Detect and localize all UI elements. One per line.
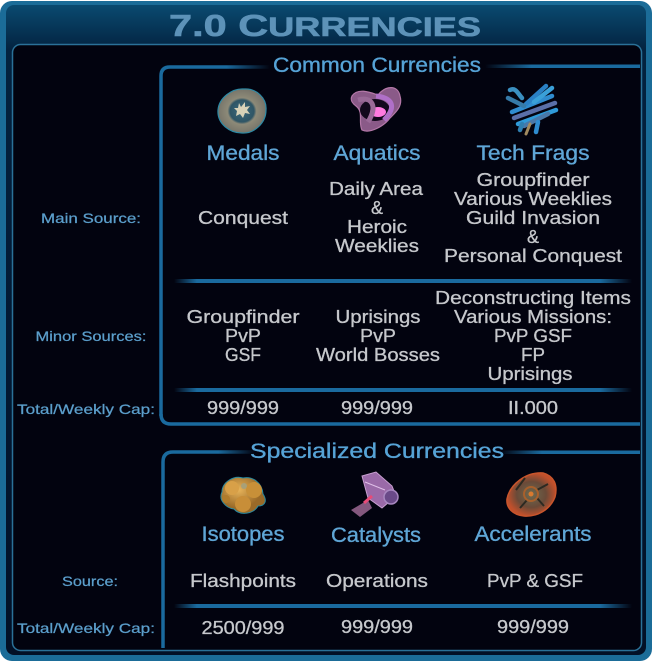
heading: aquatics: Aquatics: [334, 142, 420, 165]
text: aquatics minor sources: Uprisings: [336, 307, 420, 327]
heading: common currencies: Common Currencies: [273, 54, 481, 77]
text: medals cap: 999/999: [207, 398, 279, 418]
heading: specialized currencies: Specialized Currencies: [250, 440, 504, 463]
label: minor sources: Minor Sources:: [36, 328, 146, 344]
heading: accelerants: Accelerants: [474, 523, 592, 546]
text: flashpoints: Flashpoints: [190, 571, 296, 591]
heading: tech frags: Tech Frags: [476, 142, 590, 165]
text: tech frags cap: II.000: [508, 398, 558, 418]
text: medals minor sources: Groupfinder: [186, 307, 300, 327]
text: aquatics minor sources: [316, 307, 440, 365]
text: tech frags minor sources: [435, 288, 631, 384]
icon: aquatic: [351, 88, 401, 131]
text: tech frags main source: Personal Conquest: [444, 246, 622, 266]
panel: common currencies: [17, 54, 640, 424]
title: 7.0 C URRENCIES: [169, 8, 481, 43]
text: aquatics main source: [329, 179, 424, 256]
text: pvp and gsf: PvP & GSF: [487, 571, 583, 591]
icon: isotopes: [221, 477, 265, 513]
text: tech frags main source: [444, 170, 622, 266]
label: total weekly cap: Total/Weekly Cap:: [17, 401, 155, 417]
text: tech frags minor sources: Various Missions:: [454, 307, 612, 327]
text: isotopes cap: 2500/999: [202, 618, 284, 638]
icon: tech frags: [508, 86, 556, 134]
text: tech frags minor sources: Uprisings: [488, 364, 572, 384]
text: medals minor sources: PvP: [225, 326, 261, 346]
panel: specialized currencies: [17, 440, 640, 648]
text: conquest: Conquest: [198, 208, 288, 228]
text: medals minor sources: GSF: [225, 345, 261, 365]
text: tech frags minor sources: FP: [521, 345, 545, 365]
text: aquatics main source: &: [371, 198, 383, 218]
text: accelerants cap: 999/999: [497, 617, 569, 637]
panel frame: specialized: [163, 450, 640, 648]
label: total weekly cap: Total/Weekly Cap:: [17, 620, 155, 636]
label: source: Source:: [62, 573, 118, 589]
text: aquatics cap: 999/999: [341, 398, 413, 418]
heading: medals: Medals: [206, 142, 280, 165]
label: main source: Main Source:: [41, 210, 141, 226]
heading: isotopes: Isotopes: [202, 523, 284, 546]
heading: catalysts: Catalysts: [331, 524, 421, 547]
panel frame: common: [161, 64, 640, 424]
text: aquatics minor sources: World Bosses: [316, 345, 440, 365]
icon: medal: [218, 89, 266, 133]
text: aquatics main source: Daily Area: [329, 179, 424, 199]
text: medals minor sources: [186, 307, 300, 365]
text: tech frags minor sources: PvP GSF: [494, 326, 572, 346]
text: tech frags main source: Groupfinder: [476, 170, 590, 190]
text: tech frags main source: Guild Invasion: [466, 208, 600, 228]
icon: catalysts: [351, 472, 398, 517]
icon: accelerants: [507, 473, 556, 516]
text: catalysts cap: 999/999: [341, 617, 413, 637]
text: tech frags main source: Various Weeklies: [454, 189, 612, 209]
text: aquatics main source: Heroic: [347, 217, 407, 237]
text: tech frags main source: &: [527, 227, 539, 247]
text: aquatics minor sources: PvP: [360, 326, 396, 346]
text: tech frags minor sources: Deconstructing Items: [435, 288, 631, 308]
text: aquatics main source: Weeklies: [335, 236, 419, 256]
text: operations: Operations: [326, 571, 428, 591]
